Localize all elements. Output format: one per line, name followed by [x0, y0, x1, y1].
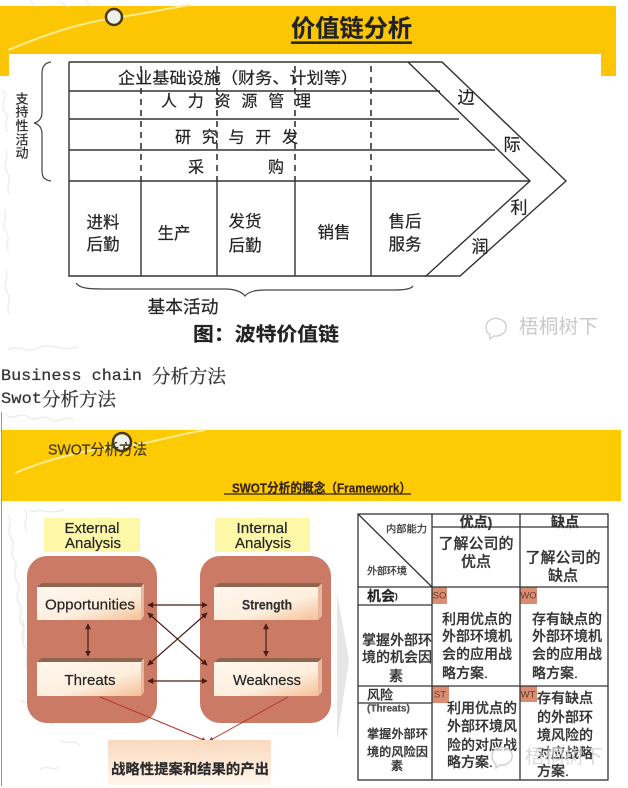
text: WT strategy: 存有缺点 — [537, 690, 593, 706]
text: matrix headers: 内部能力 — [386, 522, 427, 536]
table: SWOT matrix — [358, 514, 608, 780]
text: ST strategy: 险的对应战 — [447, 737, 517, 753]
brace: primary activities — [76, 283, 413, 296]
text: threats cell: 掌握外部环 — [367, 726, 428, 741]
panel: value chain slide — [0, 0, 616, 350]
text: opportunities cell — [362, 588, 432, 684]
text: understand strengths: 优点 — [461, 554, 491, 570]
panel: external rounded block — [27, 556, 157, 723]
text: SWOT heading — [1, 386, 117, 412]
text: matrix headers: 缺点 — [551, 514, 579, 530]
text: primary activity cells: 发货 — [228, 212, 262, 231]
text: threats cell: 风险 — [367, 688, 393, 702]
panel: internal rounded block — [200, 556, 331, 723]
title: value chain analysis: 价值链分析 — [291, 16, 412, 42]
box: weakness: Weakness — [233, 673, 301, 689]
watermark: top: 梧桐树下 — [519, 316, 598, 338]
box: strategy proposal output: 战略性提案和结果的产出 — [111, 760, 269, 778]
label box: external analysis: Analysis — [65, 536, 121, 552]
chart: Porter value chain diagram — [69, 62, 566, 276]
text: SWOT heading: 分析方法 — [42, 386, 117, 412]
text: WT strategy — [537, 690, 593, 779]
text: understand weaknesses: 缺点 — [548, 568, 578, 584]
brace: support activities — [34, 62, 51, 181]
text: ST strategy: 利用优点的 — [447, 700, 517, 716]
label: support activities: 动 — [15, 146, 29, 160]
text: primary activity cells: 生产 — [158, 224, 190, 243]
text: matrix headers — [367, 514, 579, 578]
text: understand strengths: 了解公司的 — [438, 536, 514, 552]
watermark: top — [486, 316, 598, 339]
text: SO strategy: 略方案. — [442, 665, 488, 681]
text: understand weaknesses: 了解公司的 — [525, 550, 601, 566]
text: threats cell: 素 — [391, 759, 403, 773]
box: strategy proposal output — [108, 740, 271, 785]
text: WO strategy: 存有缺点的 — [532, 611, 602, 627]
label: support activities: 持 — [15, 104, 29, 120]
text: primary activity cells: 服务 — [388, 235, 422, 254]
text: ST strategy: 外部环境风 — [447, 718, 517, 734]
text: WT strategy: 对应战略 — [537, 745, 593, 761]
label box: external analysis: External — [64, 521, 120, 537]
text: WT strategy: 方案. — [537, 763, 569, 779]
text: margin label — [458, 88, 528, 256]
label: support activities: 支 — [15, 92, 29, 106]
text: understand weaknesses — [525, 550, 601, 584]
text: SO strategy: 利用优点的 — [442, 611, 512, 627]
icon: SWOT ring ornament — [113, 433, 131, 451]
text: understand strengths — [438, 536, 514, 570]
text: WO strategy: 会的应用战 — [532, 646, 602, 662]
tags: strategy codes: WT — [521, 690, 536, 700]
text: WO strategy: 略方案. — [532, 665, 578, 681]
tags: strategy codes — [432, 587, 537, 703]
box: threats — [37, 658, 144, 696]
box: opportunities: Opportunities — [45, 596, 135, 614]
text: business chain heading — [1, 363, 227, 389]
label box: external analysis — [44, 518, 140, 552]
text: infrastructure row: 企业基础设施（财务、计划等） — [118, 70, 358, 88]
text: threats cell: 境的风险因 — [367, 744, 428, 759]
tags: strategy codes: SO — [433, 590, 446, 602]
tags: strategy codes: WO — [520, 590, 537, 602]
title: SWOT analysis method: SWOT分析方法 — [48, 442, 147, 458]
text: ST strategy: 略方案. — [447, 754, 493, 770]
icon: ring ornament — [106, 9, 122, 25]
text: margin label: 利 — [510, 198, 528, 218]
tags: strategy codes: ST — [434, 690, 446, 700]
text: procurement row — [188, 158, 284, 176]
decoration chevron — [337, 593, 349, 740]
text: opportunities cell: 机会) — [367, 588, 398, 604]
text: opportunities cell: 掌握外部环 — [362, 632, 432, 648]
text: business chain heading: Business chain — [1, 367, 142, 385]
text: WT strategy: 境风险的 — [537, 727, 593, 743]
text: procurement row: 采 — [188, 158, 204, 176]
caption: Porter value chain: 图：波特价值链 — [193, 324, 339, 346]
text: procurement row: 购 — [268, 158, 284, 176]
text: ST strategy — [447, 700, 517, 770]
panel: SWOT slide — [2, 412, 621, 786]
text: primary activity cells: 售后 — [388, 212, 422, 231]
text: business chain heading: 分析方法 — [152, 363, 227, 389]
box: opportunities — [37, 583, 144, 620]
text: primary activity cells: 销售 — [318, 223, 350, 242]
text: matrix headers: 外部环境 — [367, 564, 407, 578]
label: support activities: 活 — [15, 132, 29, 148]
text: SO strategy: 会的应用战 — [442, 646, 512, 662]
text: SO strategy — [442, 611, 512, 681]
label box: internal analysis: Analysis — [235, 536, 291, 552]
label: support activities: 性 — [15, 118, 29, 134]
text: threats cell — [367, 688, 428, 773]
text: human resources row: 人力资源管理 — [161, 92, 311, 110]
arrows: relationships between factors — [88, 605, 266, 681]
banner: value chain yellow header — [0, 6, 616, 76]
text: SWOT heading: Swot — [1, 390, 42, 408]
text: matrix headers: 优点) — [460, 514, 492, 530]
banner: SWOT yellow header — [2, 430, 621, 501]
label box: internal analysis — [215, 518, 310, 552]
label: primary activities: 基本活动 — [148, 297, 218, 317]
text: primary activity cells: 后勤 — [228, 236, 262, 255]
text: WT strategy: 的外部环 — [537, 709, 593, 725]
box: threats: Threats — [64, 673, 116, 689]
arrows: to strategy output — [100, 697, 288, 741]
text: primary activity cells — [86, 212, 422, 255]
box: strength — [214, 583, 322, 620]
label box: internal analysis: Internal — [236, 521, 288, 537]
text: research row: 研究与开发 — [175, 128, 298, 146]
text: threats cell: (Threats) — [367, 704, 410, 714]
box: weakness — [214, 658, 322, 696]
text: SO strategy: 外部环境机 — [442, 628, 512, 644]
box: strength: Strength — [242, 598, 292, 612]
watermark: bottom: 梧桐树下 — [525, 746, 603, 768]
label: support activities — [15, 92, 29, 160]
text: primary activity cells: 进料 — [86, 213, 120, 232]
text: opportunities cell: 境的机会因 — [362, 649, 432, 665]
text: primary activity cells: 后勤 — [86, 235, 120, 254]
text: margin label: 边 — [458, 88, 474, 108]
text: margin label: 润 — [472, 238, 488, 256]
text: WO strategy — [532, 611, 602, 681]
text: margin label: 际 — [504, 136, 520, 154]
heading: SWOT framework concept: SWOT分析的概念（Framework） — [232, 480, 411, 496]
text: WO strategy: 外部环境机 — [532, 628, 602, 644]
text: opportunities cell: 素 — [389, 668, 403, 684]
